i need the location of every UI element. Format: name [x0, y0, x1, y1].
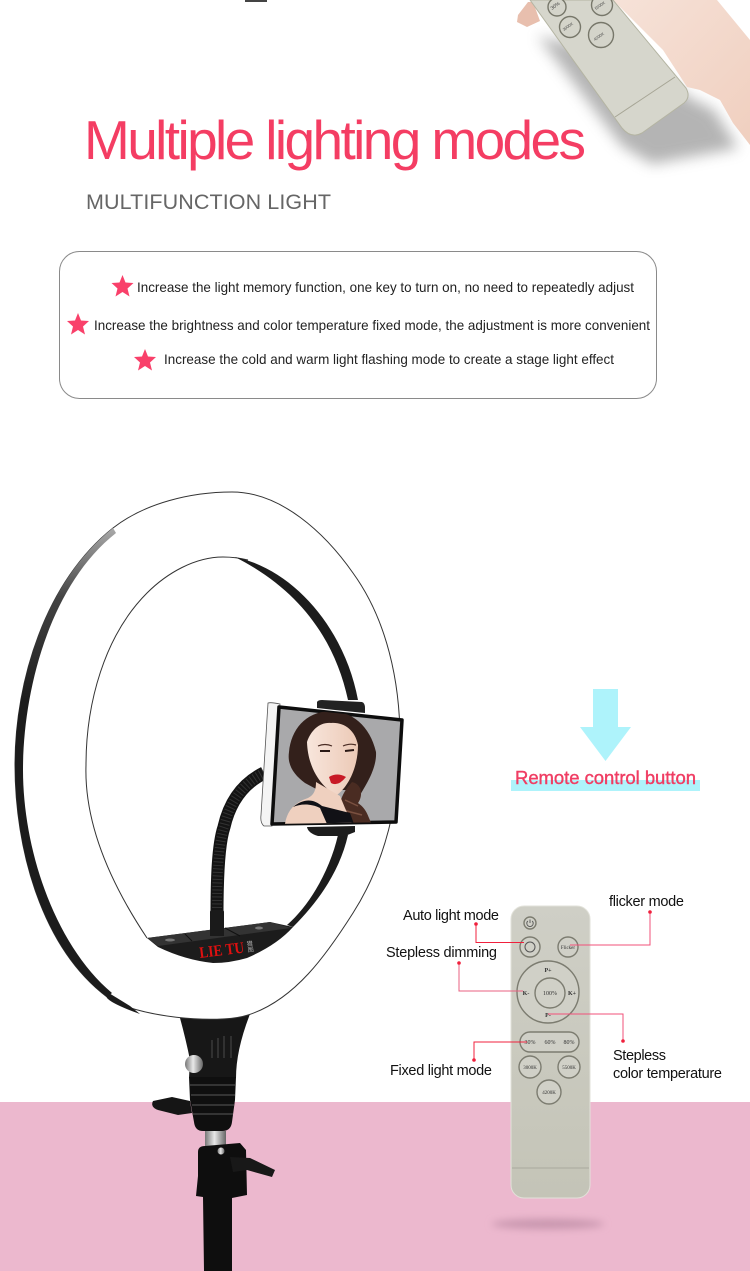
callout: stepless dimming: [386, 945, 523, 991]
photo: hand holding remote: 3000K: [562, 21, 574, 32]
callout: auto light mode: Auto light mode: [403, 908, 499, 924]
logo small mark: 图: [247, 946, 254, 954]
arrow: down to remote caption: [580, 689, 631, 761]
top clamp: [317, 700, 365, 713]
remote control: 80%: [564, 1040, 574, 1046]
pink floor band: [0, 1102, 750, 1271]
ring light: [15, 492, 402, 1271]
logo small mark: [246, 939, 254, 954]
remote control: 60%: [544, 1040, 556, 1046]
caption: remote control button: Remote control button: [515, 767, 696, 788]
callout: fixed light mode: [390, 1042, 527, 1079]
feature text 3: Increase the cold and warm light flashing mode to create a stage light effect: [164, 351, 614, 367]
remote control: P+: [544, 968, 552, 974]
remote control: 30%: [524, 1040, 536, 1046]
feature text 2: Increase the brightness and color temperature fixed mode, the adjustment is more convenient: [94, 317, 650, 333]
remote control: P-: [545, 1013, 551, 1019]
callout: auto light mode: [403, 908, 524, 942]
feature text 1: Increase the light memory function, one key to turn on, no need to repeatedly adjust: [137, 279, 634, 295]
remote control: [511, 906, 590, 1198]
icon: star 2: [67, 313, 89, 334]
subtitle: MULTIFUNCTION LIGHT: [86, 190, 331, 214]
LED base with LIE TU logo: [147, 920, 293, 963]
photo: hand holding remote: 30%: [550, 1, 562, 12]
phone with portrait: [261, 700, 402, 836]
remote control: K-: [523, 991, 529, 997]
callout: flicker mode: [570, 894, 684, 945]
photo: hand holding remote: [517, 0, 750, 164]
photo: hand holding remote: 5500K: [594, 0, 606, 11]
remote control: 5500K: [562, 1066, 576, 1071]
remote control: 4200K: [542, 1091, 556, 1096]
remote control: K+: [568, 991, 577, 997]
callout: flicker mode: flicker mode: [609, 894, 684, 910]
remote shadow: [492, 1219, 604, 1229]
logo text: LIE TU: [198, 940, 246, 962]
panel: features list: [60, 252, 656, 398]
remote control: 3000K: [523, 1066, 537, 1071]
icon: star 1: [112, 275, 134, 296]
bottom clamp: [307, 826, 355, 836]
gooseneck arm: [210, 773, 264, 936]
callout: stepless dimming: Stepless dimming: [386, 945, 497, 961]
title: Multiple lighting modes: [84, 109, 586, 171]
callout: stepless color temperature: [548, 1014, 722, 1082]
icon: star 3: [134, 349, 156, 370]
callout: stepless color temperature: Stepless: [613, 1048, 666, 1064]
logo small mark: 猎: [246, 939, 253, 948]
portrait: [285, 711, 376, 824]
ring body: [15, 492, 400, 1019]
remote control: 100%: [543, 991, 557, 997]
small dark mark at top edge: [245, 0, 267, 2]
callout: fixed light mode: Fixed light mode: [390, 1063, 492, 1079]
remote control: Flicker: [561, 946, 575, 951]
callout: stepless color temperature: color temperature: [613, 1066, 722, 1082]
stand: [152, 1014, 275, 1271]
photo: hand holding remote: 4200K: [593, 31, 605, 42]
